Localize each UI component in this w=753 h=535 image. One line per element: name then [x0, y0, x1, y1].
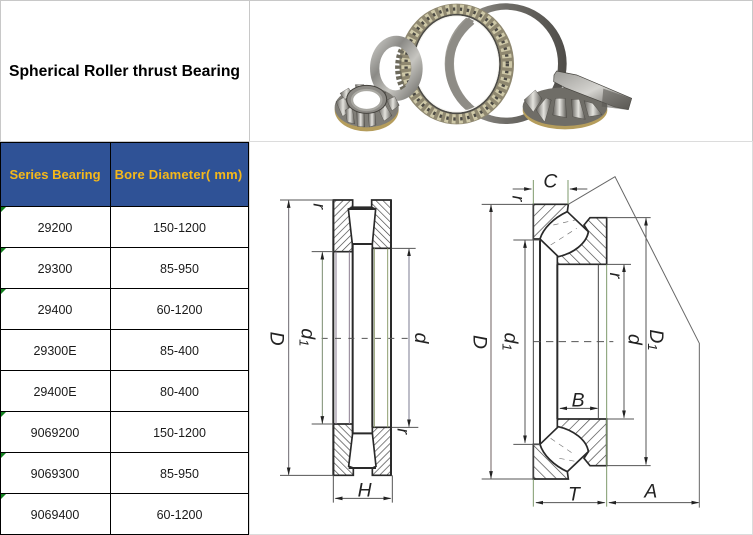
- dimension lines and arrows: [482, 177, 699, 508]
- table header: series bearing: [0, 142, 110, 207]
- dimension labels: [468, 171, 666, 505]
- dimension labels: [266, 203, 431, 502]
- section: top inner ring: [557, 218, 607, 264]
- row 9069400 bore: 60-1200: [157, 508, 202, 522]
- panel: product photo cell: [249, 0, 753, 142]
- section: top left hatched block: [333, 200, 353, 252]
- dimension labels: D: [645, 329, 666, 343]
- dimension labels: D: [266, 332, 287, 346]
- row 29300E series: 29300E: [33, 344, 77, 358]
- dimension labels: H: [358, 481, 372, 502]
- row 29300E bore: 85-400: [160, 344, 199, 358]
- dimension labels: r: [393, 428, 413, 435]
- row 9069400 series: 9069400: [31, 508, 79, 522]
- row 29400 bore: 60-1200: [157, 302, 202, 316]
- dimension labels: d: [410, 333, 431, 345]
- row 29200 bore: 150-1200: [153, 220, 206, 234]
- table header: series bearing: Series Bearing: [9, 167, 101, 182]
- dimension labels: d: [623, 334, 644, 346]
- dimension labels: 1: [645, 343, 660, 351]
- photo: spherical roller thrust bearings: [335, 3, 632, 131]
- photo: plain back ring: [445, 3, 567, 124]
- table: series and bore diameter: [0, 142, 249, 535]
- dimension lines and arrows: [280, 200, 418, 503]
- row 9069300 bore: 85-950: [160, 466, 199, 480]
- row 29400E bore: 80-400: [160, 384, 199, 398]
- dimension labels: d: [297, 328, 318, 339]
- dimension labels: A: [643, 482, 657, 503]
- section: bottom roller: [540, 427, 588, 472]
- photo: plain ring overlap: [449, 21, 472, 107]
- section: top outer ring: [533, 204, 568, 239]
- dimension labels: d: [499, 333, 520, 343]
- row 29400 series: 29400: [38, 302, 72, 316]
- photo: right roller bearing: [523, 71, 632, 129]
- section: bottom right hatched block: [372, 427, 391, 475]
- panel: title cell: [0, 0, 250, 142]
- dimension labels: 1: [499, 343, 514, 351]
- row 9069300 series: 9069300: [31, 466, 79, 480]
- photo: washer ring: [370, 36, 423, 101]
- row 29300 bore: 85-950: [160, 262, 199, 276]
- section: bottom outer ring: [533, 444, 568, 479]
- dimension labels: T: [568, 484, 581, 505]
- dimension labels: r: [509, 196, 529, 203]
- section: bottom left hatched block: [333, 424, 353, 475]
- photo: caged roller ring: [399, 4, 514, 124]
- table header: bore diameter: [110, 142, 249, 207]
- section: top roller: [540, 212, 588, 257]
- row 29300 series: 29300: [38, 262, 72, 276]
- section: body lines: [533, 180, 607, 507]
- section: body outlines: [333, 200, 391, 475]
- diagram: spherical roller bearing cross-section: [468, 171, 699, 508]
- row 9069200 series: 9069200: [31, 426, 79, 440]
- dimension labels: C: [543, 171, 558, 192]
- dimension labels: 1: [297, 339, 312, 347]
- row 9069200 bore: 150-1200: [153, 426, 206, 440]
- dimension labels: r: [606, 273, 626, 280]
- title: Spherical Roller thrust Bearing: [9, 63, 240, 80]
- panel: diagram cell: [249, 141, 753, 535]
- dimension labels: B: [572, 390, 585, 411]
- row 29200 series: 29200: [38, 220, 72, 234]
- table header: bore diameter: Bore Diameter( mm): [115, 167, 242, 182]
- dimension labels: D: [468, 335, 489, 349]
- row 29400E series: 29400E: [33, 384, 77, 398]
- photo: left roller bearing: [335, 85, 399, 131]
- dimension labels: r: [309, 203, 329, 210]
- section: top right hatched block: [372, 200, 391, 248]
- photo: tapered ring on top: [554, 71, 632, 110]
- section: bottom inner ring: [557, 419, 607, 466]
- diagram: thrust washer cross-section: [266, 200, 431, 503]
